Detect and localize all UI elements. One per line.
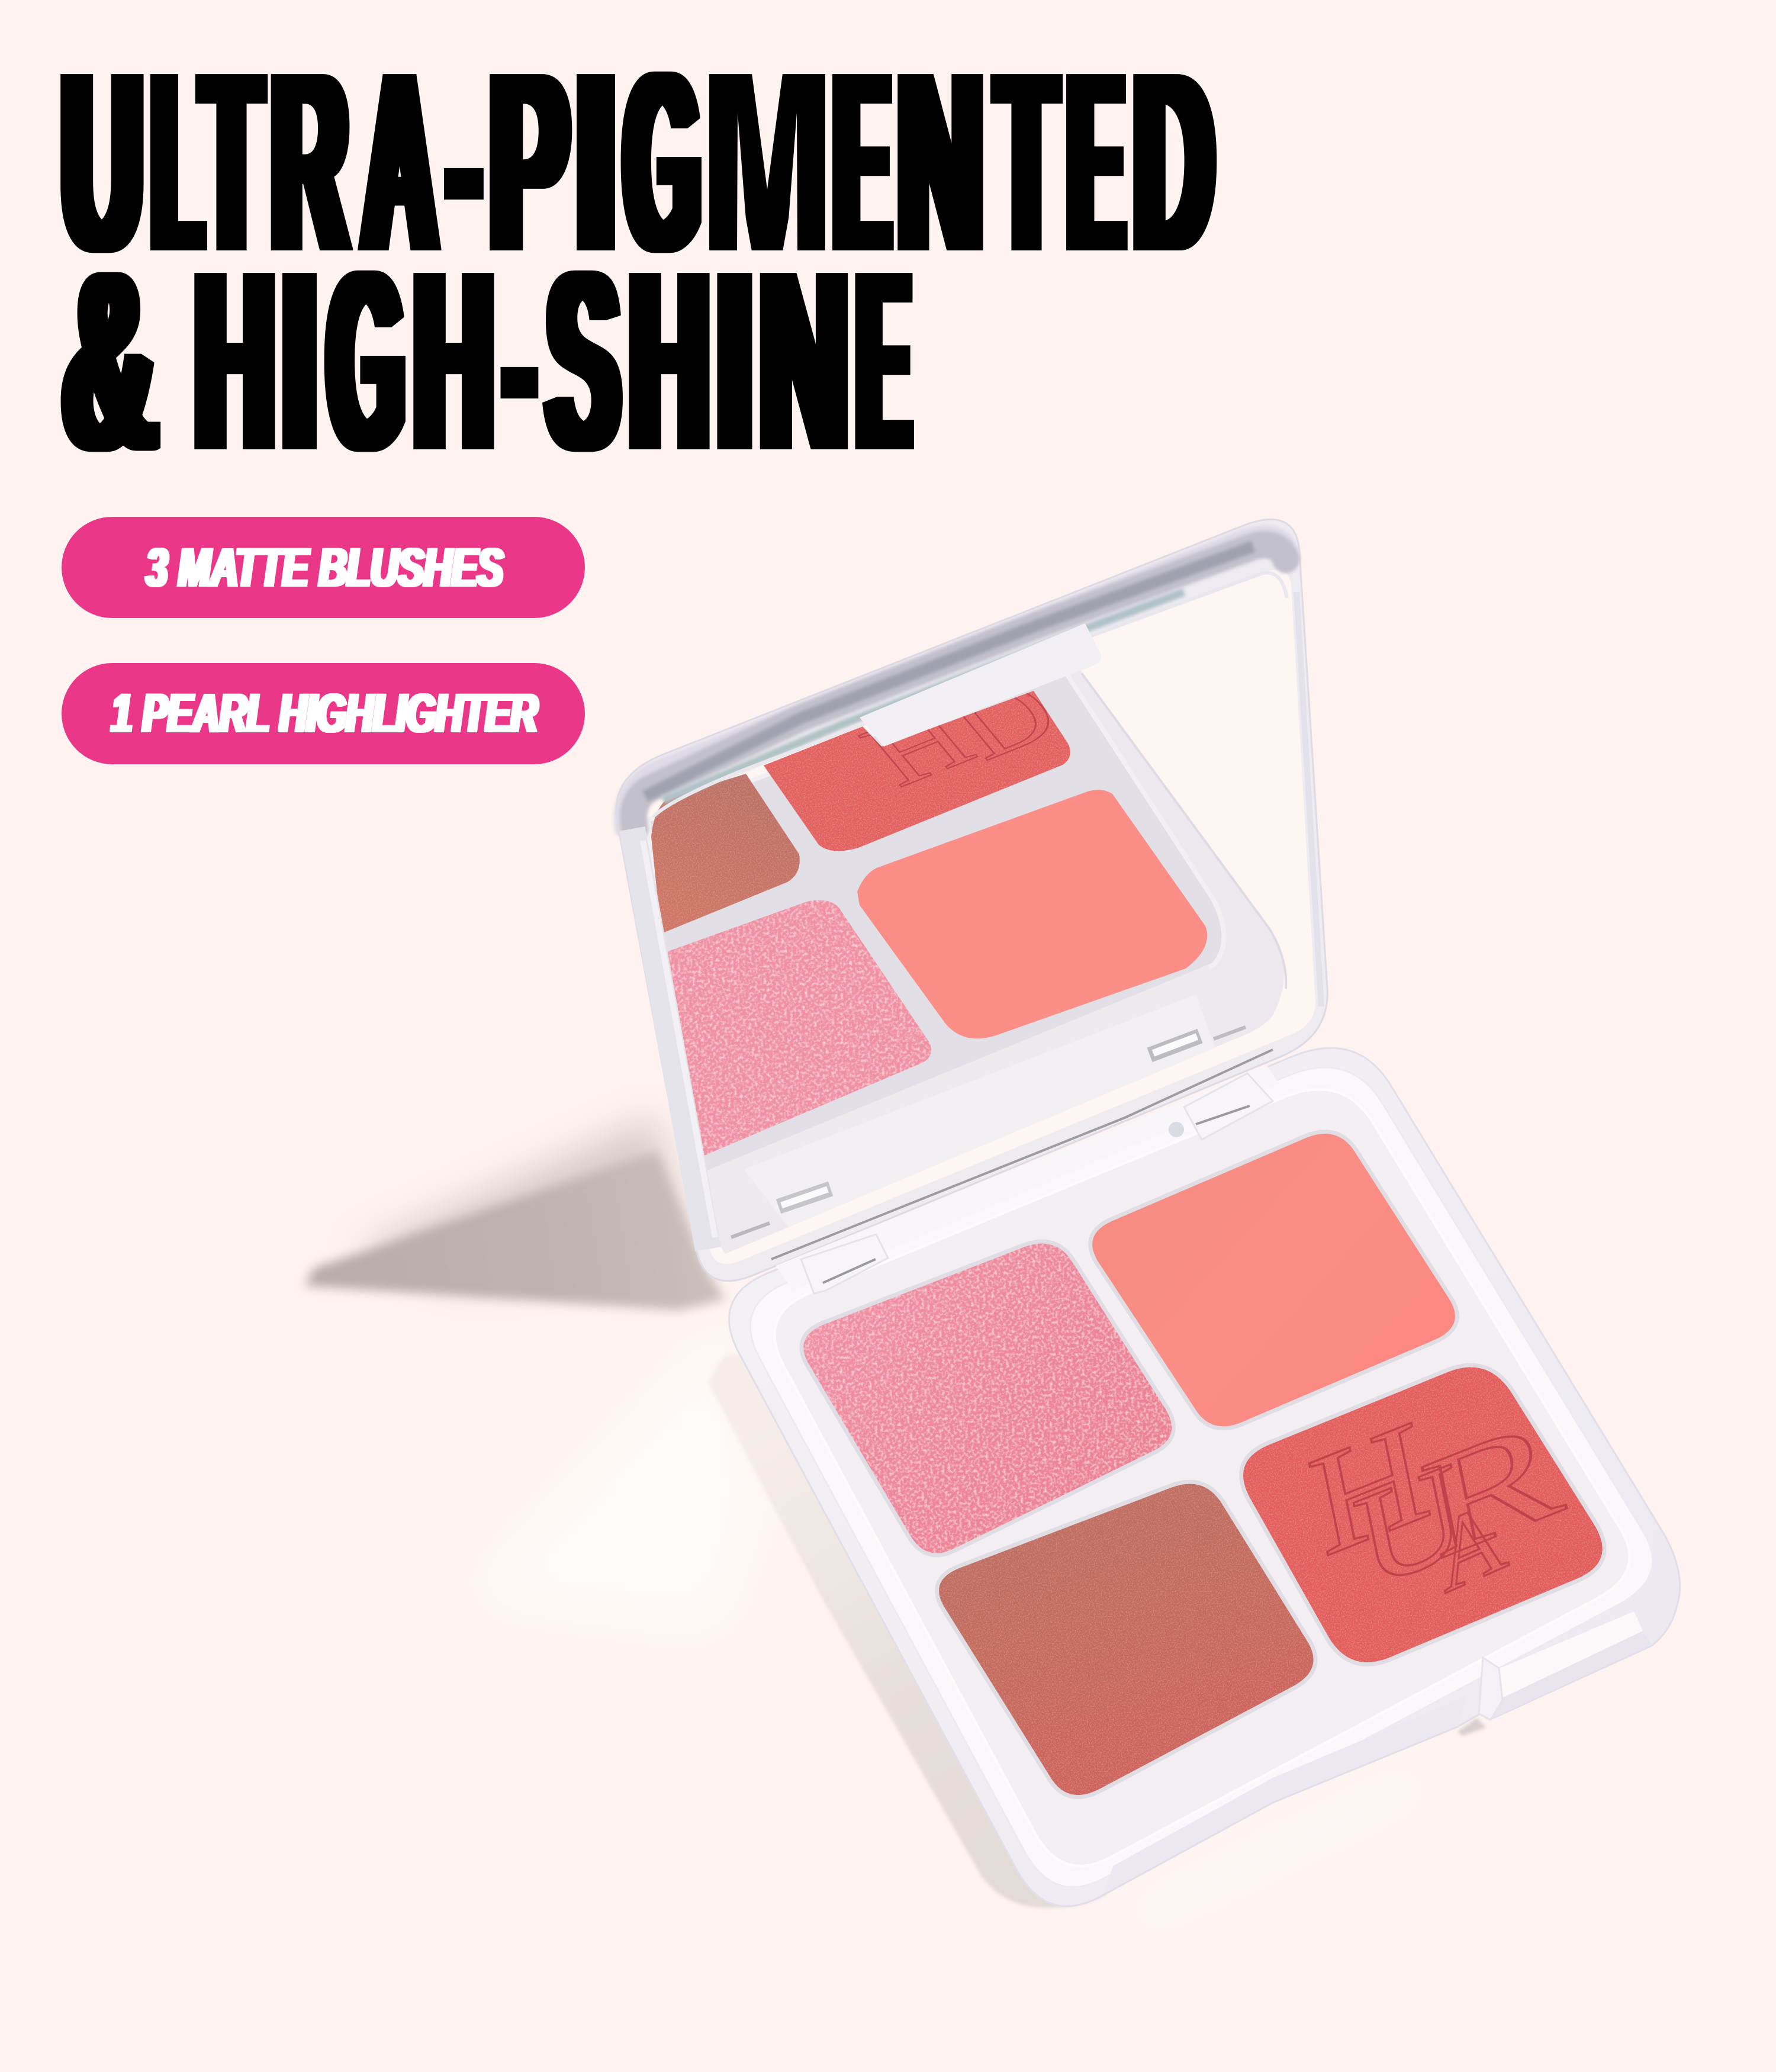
headline line 1: T (998, 20, 1056, 304)
pan well highlighter (803, 1243, 1172, 1553)
reflected logo letters: H (841, 687, 996, 806)
headline line 2: I (717, 219, 752, 503)
headline line 1: I (575, 20, 617, 304)
ledge right of notch (1497, 1611, 1643, 1698)
pill label: 3 MATTE BLUSHES (146, 538, 503, 598)
headline line 1: L (153, 20, 201, 304)
pill background (62, 517, 585, 618)
reflected red pan with logo (764, 691, 1070, 851)
hinge gap white strip (776, 1066, 1279, 1291)
headline line 1: U (62, 20, 142, 304)
base right hinge tab (1184, 1073, 1273, 1140)
headline: E (858, 219, 909, 503)
reflected red pan shape (764, 691, 1070, 851)
hinge pin left (778, 1189, 831, 1206)
lid outer shell (616, 519, 1327, 1281)
small right glint (1214, 1027, 1246, 1039)
reflected frame inner well (648, 663, 1224, 1175)
reflected frame outer contour (1082, 673, 1286, 989)
lid left frosted rim (632, 829, 708, 1249)
headline line 2: I (282, 219, 317, 503)
hinge pin left shine (781, 1189, 828, 1205)
reflected logo letters (857, 693, 1049, 787)
lid band lavender (633, 545, 1286, 829)
brown matte blush pan (939, 1484, 1314, 1795)
lid right clear rim line (1296, 592, 1321, 1006)
headline line 2: & (63, 219, 156, 503)
lid band blue tint (663, 592, 1184, 800)
headline line 1: P (490, 20, 568, 304)
reflected highlighter pan (663, 900, 931, 1156)
mirror inner edge line (653, 572, 1287, 817)
lid left rim highlight (643, 841, 715, 1237)
base left hinge tab (801, 1234, 888, 1294)
compact base (707, 1048, 1680, 1908)
reflected logo letters: D (927, 660, 1082, 780)
hinge dot (1169, 1122, 1184, 1137)
base outer rim and lavender wall (729, 1048, 1680, 1906)
headline line 1: T (202, 20, 260, 304)
embossed monogram logo (1298, 1384, 1574, 1618)
lavender wall left of notch (1104, 1697, 1466, 1893)
pill: 1 pearl highlighter (62, 663, 585, 764)
embossed monogram logo: A (1427, 1478, 1514, 1616)
lid outer lavender rim (622, 533, 1292, 829)
small left glint (731, 1223, 770, 1237)
headline line 1: R (272, 20, 347, 304)
headline line 1: - (449, 20, 479, 304)
pan well coral (1092, 1134, 1455, 1426)
red matte blush pan (1243, 1367, 1603, 1662)
headline line 1: N (898, 20, 983, 304)
headline line 2: N (760, 219, 848, 503)
headline line 2: G (329, 219, 403, 503)
notch clear post (1479, 1658, 1502, 1720)
headline line 2: S (548, 219, 619, 503)
open lid with mirror (616, 519, 1327, 1281)
pill label: 1 PEARL HIGHLIGHTER (111, 683, 538, 744)
mirror tab (860, 623, 1101, 747)
reflected compact frame (645, 654, 1284, 1254)
base recessed frosted well (774, 1089, 1630, 1866)
headline line 2: H (630, 219, 709, 503)
lavender wall right of notch (1489, 1631, 1652, 1720)
pill background (62, 663, 585, 764)
base left pin line (823, 1259, 876, 1283)
headline line 2: H (195, 219, 274, 503)
coral matte blush pan (1092, 1134, 1455, 1426)
glow below compact (1125, 1776, 1433, 1924)
base right pin line (1196, 1106, 1250, 1124)
headline line 1: E (835, 20, 889, 304)
reflected brown pan (651, 774, 800, 934)
reflected lower bright strip (744, 995, 1215, 1227)
headline line 2: - (506, 219, 533, 503)
headline line 1: A (363, 20, 436, 304)
pan well brown (939, 1484, 1314, 1795)
reflected lower frosted band (696, 965, 1234, 1234)
pill: 3 matte blushes (62, 517, 585, 618)
headline line 1: E (1069, 20, 1122, 304)
lid band dark core (645, 546, 1253, 796)
hinge gap dark line (771, 1050, 1273, 1259)
pearl highlighter pan (803, 1243, 1172, 1553)
headline line 1: M (708, 20, 826, 304)
embossed monogram logo: H (1298, 1388, 1441, 1588)
soft shadow penumbra (355, 1116, 693, 1285)
embossed monogram logo: R (1410, 1384, 1574, 1591)
base side wall in shadow (707, 1354, 1107, 1908)
mirror surface (642, 570, 1315, 1264)
pan wells (803, 1134, 1603, 1795)
embossed monogram logo: U (1344, 1433, 1477, 1618)
base inner contour (750, 1067, 1653, 1887)
headline line 1: G (625, 20, 699, 304)
bright light reflection on surface (462, 1317, 764, 1634)
hinge pin right (1150, 1036, 1200, 1055)
pan well red (1243, 1367, 1603, 1662)
reflected coral pan (857, 790, 1207, 1038)
shadow core (305, 1151, 725, 1310)
headline line 2: H (414, 219, 493, 503)
hinge pin right shine (1153, 1037, 1197, 1053)
cast shadow of lid (305, 1116, 725, 1310)
notch shadow (1458, 1718, 1486, 1736)
headline (62, 20, 1213, 503)
product infographic canvas: D (1134, 20, 1213, 304)
